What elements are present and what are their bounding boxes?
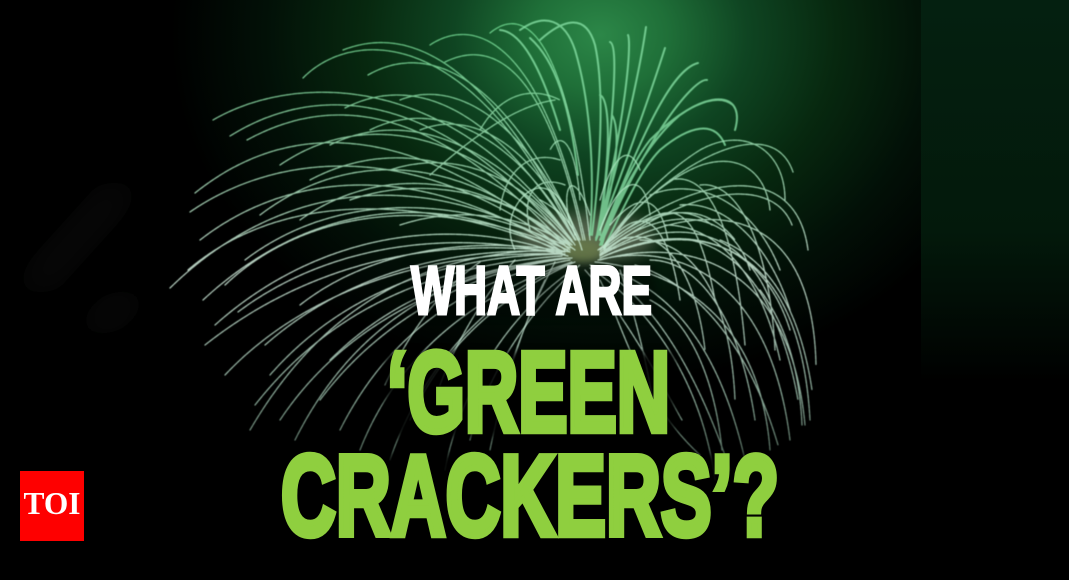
firework: right dome strands bbox=[385, 140, 816, 480]
firework: left sweeping strands bbox=[170, 24, 590, 470]
left blurred side panel bbox=[30, 185, 135, 330]
right blurred side panel bbox=[921, 0, 1069, 580]
title: green: ‘GREEN bbox=[387, 329, 670, 455]
firework: burst core bbox=[515, 214, 655, 262]
logo: TOI: TOI bbox=[24, 485, 80, 521]
photo panel: green firework glow bbox=[218, 0, 921, 344]
firework: upper green plumes bbox=[500, 20, 737, 248]
title: what are: WHAT ARE bbox=[411, 252, 652, 329]
logo: TOI bbox=[20, 471, 84, 541]
title text shadow bbox=[278, 264, 784, 543]
title: crackers: CRACKERS’? bbox=[281, 433, 779, 560]
